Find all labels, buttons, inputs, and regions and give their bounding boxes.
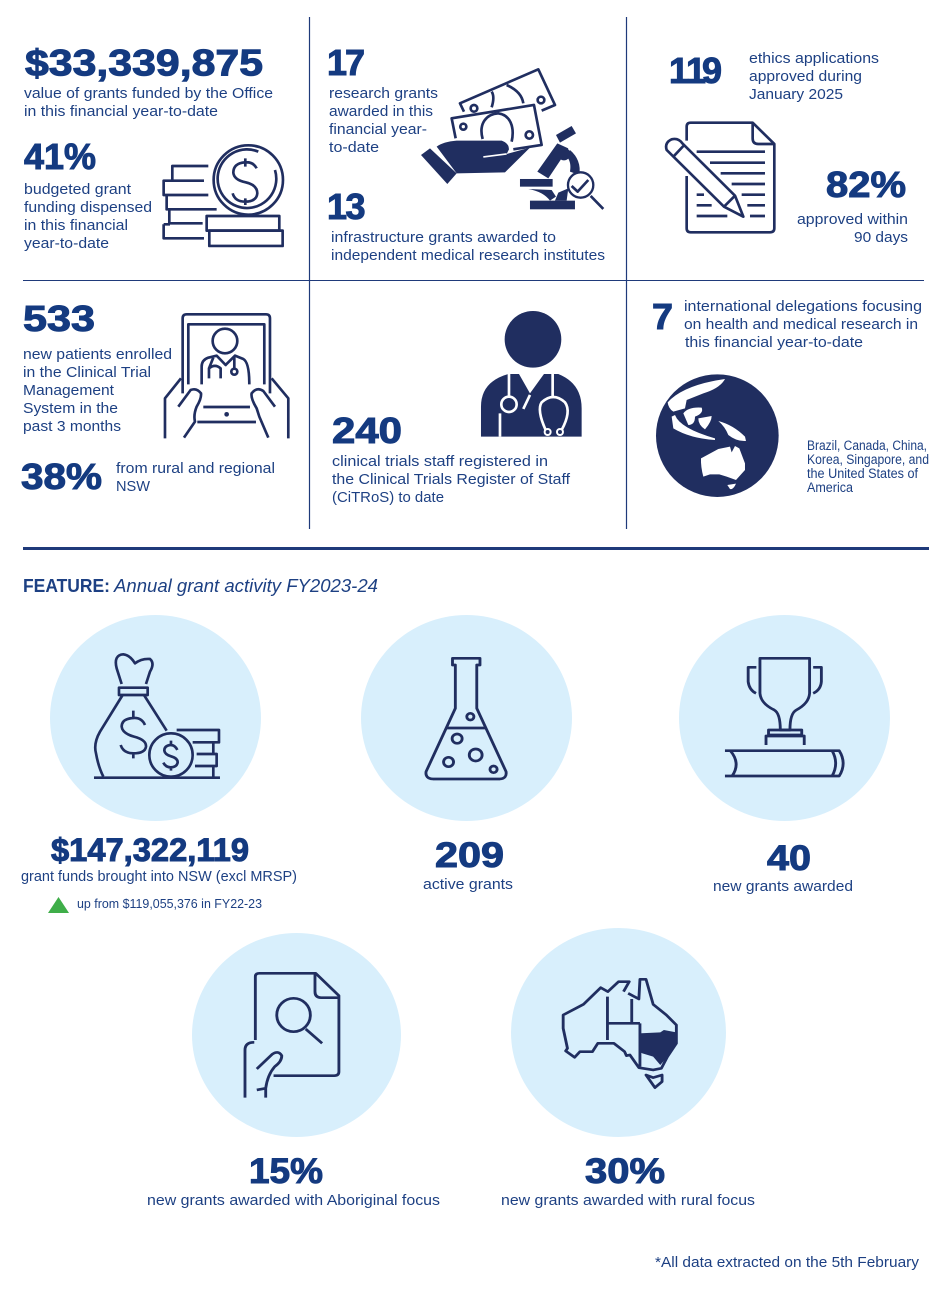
- text: ethics applications: ethics applications: [749, 50, 879, 67]
- text: research grants: research grants: [329, 85, 438, 102]
- text: new grants awarded: new grants awarded: [713, 878, 853, 895]
- text: international delegations: this financial year-to-date: [685, 334, 863, 351]
- stat: 30%: 30%: [585, 1152, 665, 1191]
- panel: new patients enrolled: [21, 298, 288, 497]
- text: ethics applications: January 2025: [749, 86, 843, 103]
- text: from rural and regional NSW: from rural and regional: [116, 460, 275, 477]
- stat: 240: 240: [332, 410, 402, 451]
- stat: 40: 40: [767, 839, 811, 878]
- text: international delegations: international delegations focusing: [684, 298, 922, 315]
- text: new patients enrolled: past 3 months: [23, 418, 121, 435]
- icon: document with magnifier and hand: [245, 973, 339, 1098]
- text: clinical trials staff registered: clinical trials staff registered in: [332, 453, 548, 470]
- text: new patients enrolled: new patients enrolled: [23, 346, 172, 363]
- icon: coin stack: [164, 145, 283, 246]
- stat: 38%: 38%: [21, 456, 102, 497]
- stat: $33,339,875: $33,339,875: [25, 42, 263, 84]
- text: research grants: to-date: [329, 139, 379, 156]
- icon: green up triangle: [48, 897, 69, 913]
- panel: international delegations: [652, 296, 929, 497]
- circle background: [192, 933, 401, 1137]
- stat: 13: 13: [327, 186, 366, 227]
- icon: hand with money and microscope: [421, 69, 603, 209]
- stat: 17: 17: [327, 42, 365, 83]
- footnote: *All data extracted on the 5th February: [655, 1254, 920, 1271]
- text: budgeted grant funding: year-to-date: [24, 235, 109, 252]
- text: from rural and regional NSW: NSW: [116, 478, 151, 495]
- text: new patients enrolled: in the Clinical Trial: [23, 364, 151, 381]
- circle background: [511, 928, 726, 1137]
- text: ethics applications: approved during: [749, 68, 862, 85]
- text: up from: up from $119,055,376 in FY22-23: [77, 896, 262, 911]
- text: budgeted grant funding: in this financial: [24, 217, 128, 234]
- text: clinical trials staff registered: (CiTRoS) to date: [332, 489, 444, 506]
- stat: 82%: 82%: [826, 164, 906, 205]
- text: budgeted grant funding: budgeted grant: [24, 181, 132, 198]
- text: list of countries: Korea, Singapore, and: [807, 452, 929, 467]
- text: clinical trials staff registered: the Clinical Trials Register of Staff: [332, 471, 571, 488]
- stat: $147,322,119: $147,322,119: [51, 832, 249, 868]
- text: Aboriginal focus: new grants awarded with Aboriginal focus: [147, 1192, 440, 1209]
- text: infrastructure grants: independent medical research institutes: [331, 247, 605, 264]
- icon: document and pen: [666, 123, 774, 232]
- text: value of grants: value of grants funded by the Office: [24, 85, 273, 102]
- stat: 209: 209: [435, 836, 504, 875]
- circle background: [50, 615, 261, 821]
- stat: 119: 119: [669, 50, 722, 91]
- icon: flask: [426, 658, 506, 779]
- text: research grants: awarded in this: [329, 103, 433, 120]
- text: infrastructure grants: infrastructure grants awarded to: [331, 229, 556, 246]
- icon: doctor: [481, 311, 582, 437]
- panel: ethics applications: [666, 50, 908, 246]
- text: list of countries: the United States of: [807, 466, 918, 481]
- text: international delegations: on health and medical research in: [684, 316, 918, 333]
- icon: hands holding tablet with doctor: [165, 314, 288, 438]
- icon: Australia map: [563, 979, 676, 1088]
- text: new patients enrolled: Management: [23, 382, 115, 399]
- panel: rural focus: [501, 928, 755, 1209]
- heading: feature: FEATURE:: [23, 576, 110, 596]
- panel: new grants awarded: [679, 615, 890, 895]
- text: active grants: active grants: [423, 876, 513, 893]
- circle background: [679, 615, 890, 821]
- icon: trophy on book: [725, 658, 843, 776]
- text: approved within 90 days: 90 days: [854, 229, 908, 246]
- text: grant funds brought into NSW: grant funds brought into NSW (excl MRSP): [21, 868, 297, 885]
- panel: research and infrastructure grants: [327, 42, 605, 264]
- text: rural focus: new grants awarded with rural focus: [501, 1192, 755, 1209]
- panel: Aboriginal focus: [147, 933, 440, 1209]
- text: list of countries: Brazil, Canada, China,: [807, 438, 927, 453]
- panel: grants funded: [24, 42, 283, 252]
- text: new patients enrolled: System in the: [23, 400, 118, 417]
- stat: 41%: 41%: [24, 136, 96, 177]
- panel: active grants: [361, 615, 572, 893]
- stat: 533: 533: [23, 298, 95, 339]
- text: research grants: financial year-: [329, 121, 427, 138]
- text: approved within 90 days: approved within: [797, 211, 908, 228]
- panel: clinical trials staff: [332, 311, 582, 506]
- stat: 7: 7: [652, 296, 673, 337]
- text: value of grants: in this financial year-to-date: [24, 103, 218, 120]
- panel: grant funds: [21, 615, 297, 913]
- icon: globe: [656, 374, 779, 497]
- circle background: [361, 615, 572, 821]
- icon: money bag: [94, 654, 220, 778]
- text: list of countries: America: [807, 480, 853, 495]
- text: budgeted grant funding: funding dispensed: [24, 199, 152, 216]
- heading: feature: Annual grant activity FY2023-24: [113, 576, 378, 596]
- stat: 15%: 15%: [249, 1152, 323, 1191]
